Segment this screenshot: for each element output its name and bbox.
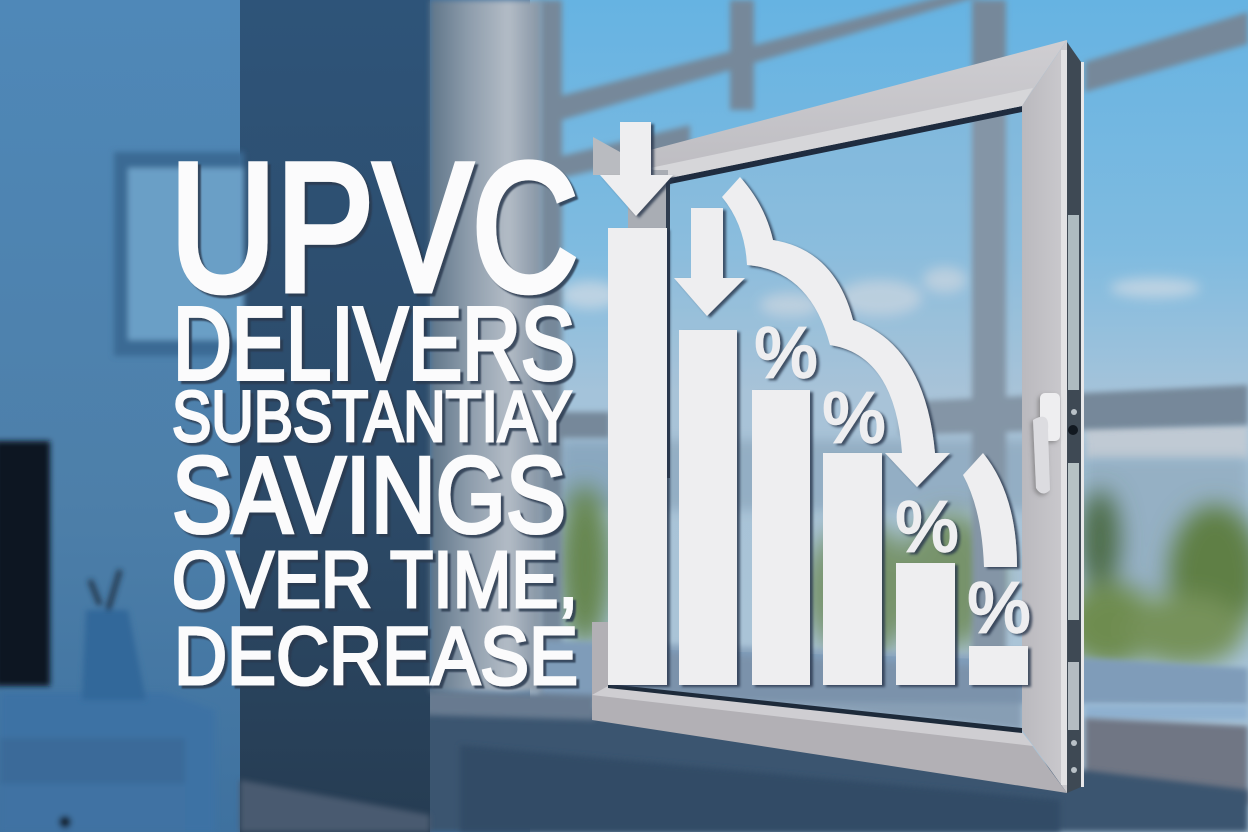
frame bottom lip [592, 686, 1033, 746]
frame glass shadow line [670, 106, 1022, 184]
bar 1 [608, 228, 667, 685]
bar 6 [969, 646, 1028, 685]
window handle [1033, 393, 1060, 494]
bar 5 [896, 563, 955, 685]
frame bottom rail [592, 622, 1067, 793]
vase [82, 570, 146, 700]
title line: UPVC: UPVC [170, 125, 578, 329]
bar 3 [752, 390, 810, 685]
bar 4 [823, 453, 882, 685]
trees outside [559, 485, 1248, 667]
title line: SUBSTANTIAY: SUBSTANTIAY [172, 378, 572, 457]
title line: DECREASE: DECREASE [174, 611, 578, 702]
frame top rail lip [650, 88, 1033, 178]
wainscot panel below window [425, 690, 1248, 832]
frame hardware strip [1067, 42, 1084, 793]
window jamb [430, 0, 542, 692]
frame corner flap [593, 137, 620, 175]
window sill [540, 640, 1248, 705]
arrow: first down arrow [600, 122, 673, 216]
bar 2 [679, 330, 737, 685]
bar chart with decreasing cost [600, 122, 1031, 685]
distant sea [1085, 458, 1248, 598]
arrow: second down arrow [674, 208, 745, 316]
window bars [540, 0, 1248, 700]
arrow: final curved arrow [963, 453, 1017, 567]
title line: SAVINGS: SAVINGS [172, 434, 566, 555]
percent sign 4: % [967, 569, 1031, 648]
percent sign 2: % [822, 379, 886, 458]
monitor [0, 441, 50, 686]
picture on wall [114, 152, 244, 356]
title line: DELIVERS: DELIVERS [173, 286, 575, 401]
distant haze band [1085, 425, 1248, 460]
title line: OVER TIME,: OVER TIME, [172, 535, 578, 624]
uPVC window frame [592, 40, 1084, 793]
percent sign 1: % [754, 314, 818, 393]
dark wall [240, 0, 430, 832]
bottom rail glass shadow [608, 684, 1022, 733]
left light wall [0, 0, 242, 832]
arrow: stepped curved arrow [722, 177, 950, 487]
frame left post [628, 170, 668, 230]
sky through window [530, 0, 1248, 832]
title headline [170, 125, 578, 702]
frame top rail [650, 40, 1067, 178]
glass lower reflection [608, 650, 1022, 730]
glass pane tint [670, 106, 1022, 660]
dresser [0, 692, 215, 832]
clouds [560, 267, 1200, 317]
baseboard [240, 780, 430, 832]
percent sign 3: % [895, 488, 959, 567]
frame right stile [1022, 40, 1067, 793]
